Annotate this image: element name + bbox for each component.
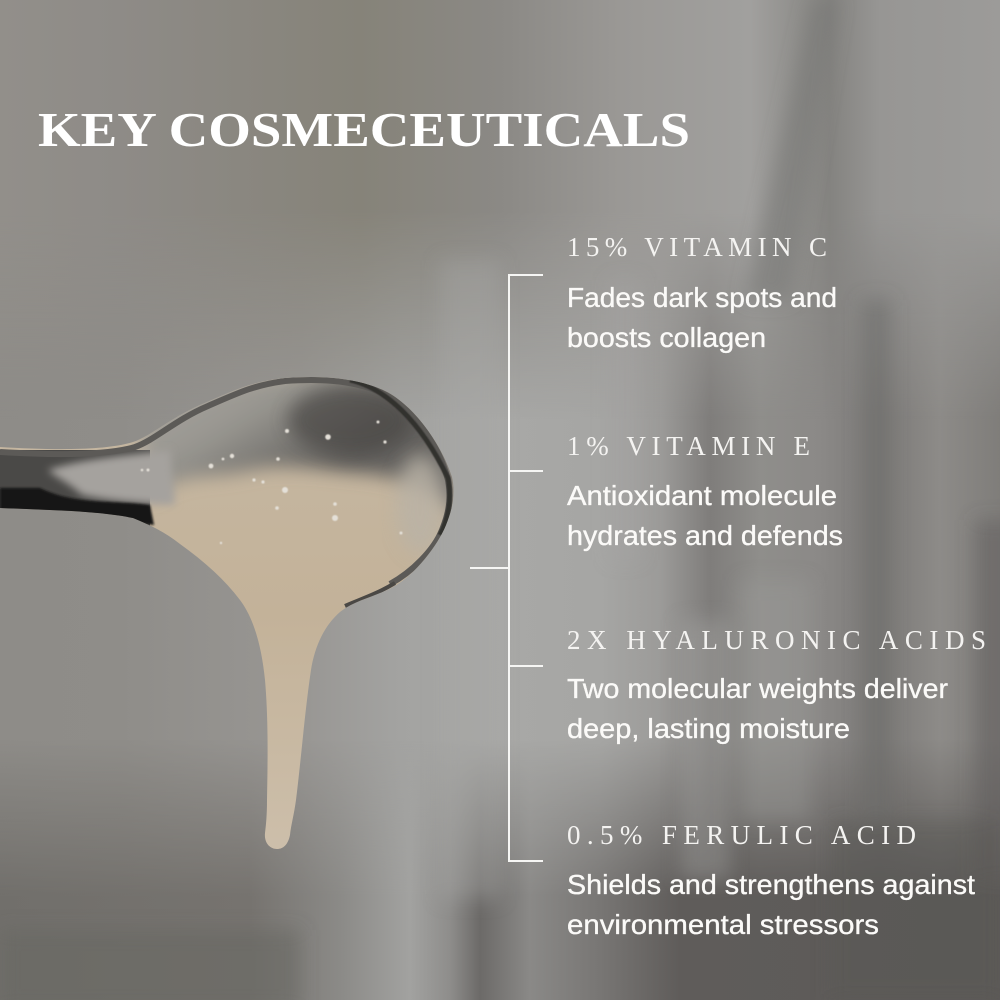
- ingredient: vitamin C: 15% VITAMIN C: [567, 232, 827, 262]
- bubbles: [141, 420, 402, 544]
- spoon with dripping serum: [0, 370, 460, 860]
- ingredient: hyaluronic acids: deep, lasting moisture: [567, 713, 850, 744]
- serum body: [0, 370, 460, 860]
- ingredient: hyaluronic acids: [567, 625, 986, 744]
- ingredient: vitamin C: boosts collagen: [567, 322, 766, 353]
- spoon rim: [0, 380, 450, 584]
- ingredient: vitamin E: Antioxidant molecule: [567, 480, 837, 511]
- ingredient: hyaluronic acids: Two molecular weights deliver: [567, 673, 948, 704]
- ingredient: ferulic acid: 0.5% FERULIC ACID: [567, 820, 916, 850]
- handle dark underside: [0, 488, 154, 525]
- handle highlight: [48, 450, 175, 505]
- dark bowl shadow: [288, 386, 412, 454]
- ingredient: vitamin C: [567, 232, 837, 353]
- title: KEY COSMECEUTICALS: [38, 102, 690, 157]
- ingredient: vitamin E: 1% VITAMIN E: [567, 431, 810, 461]
- bracket connector: [470, 275, 543, 861]
- rim dark accent: [350, 380, 450, 535]
- ingredient: vitamin C: Fades dark spots and: [567, 282, 837, 313]
- ingredient: vitamin E: [567, 431, 843, 551]
- right bowl light: [396, 455, 444, 555]
- ingredient: ferulic acid: Shields and strengthens against: [567, 869, 975, 900]
- ingredient: ferulic acid: environmental stressors: [567, 909, 879, 940]
- ingredient: hyaluronic acids: 2X HYALURONIC ACIDS: [567, 625, 986, 655]
- handle base: [0, 450, 150, 528]
- upper bowl of spoon: [140, 372, 460, 520]
- ingredient: vitamin E: hydrates and defends: [567, 520, 843, 551]
- ingredient: ferulic acid: [567, 820, 975, 940]
